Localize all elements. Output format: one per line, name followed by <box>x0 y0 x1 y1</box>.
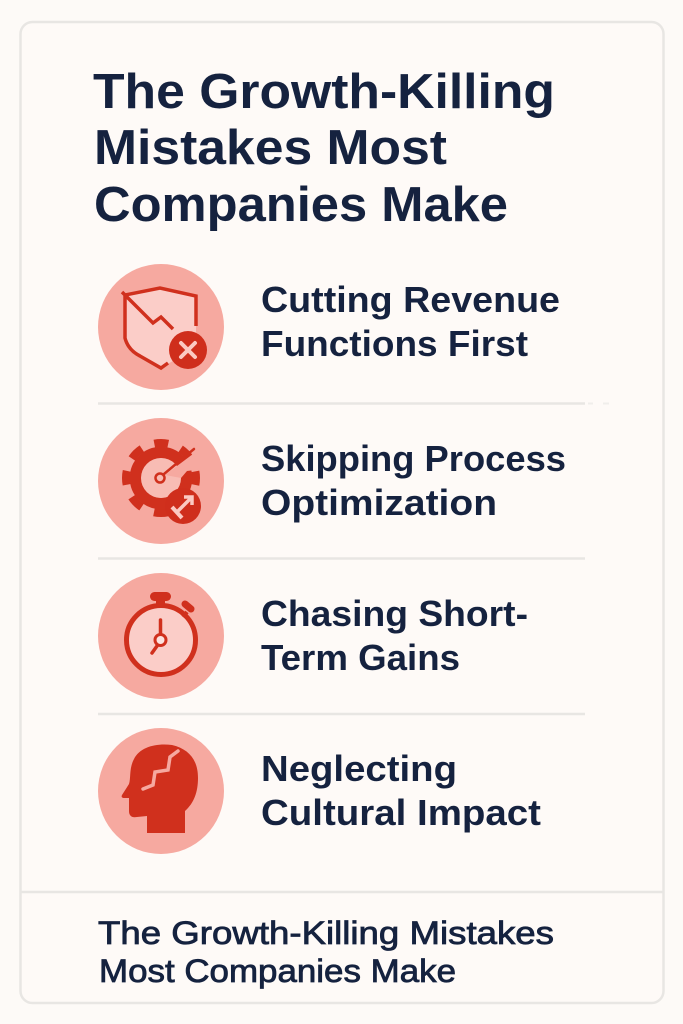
text: item label: Functions First <box>261 323 528 364</box>
icon: cracked head <box>98 728 224 854</box>
footer caption <box>98 915 554 989</box>
text: item label: Cutting Revenue <box>261 279 560 320</box>
item: cutting revenue functions first <box>98 264 560 390</box>
item: neglecting cultural impact <box>98 728 541 854</box>
title: Mistakes Most <box>94 121 447 175</box>
text: item label: Chasing Short- <box>261 593 528 634</box>
footer caption: The Growth-Killing Mistakes <box>98 915 554 951</box>
text: item label <box>261 279 560 364</box>
icon: shield with falling line and x badge <box>98 264 224 390</box>
item: skipping process optimization <box>98 418 566 544</box>
item: chasing short-term gains <box>98 573 528 699</box>
text: item label: Cultural Impact <box>261 792 541 833</box>
text: item label: Neglecting <box>261 748 457 789</box>
footer caption: Most Companies Make <box>99 953 456 989</box>
icon: stopwatch <box>98 573 224 699</box>
text: item label: Term Gains <box>261 637 460 678</box>
text: item label <box>261 593 528 678</box>
icon: gear with gauge and arrow badge <box>98 418 224 544</box>
title: The Growth-Killing <box>93 65 555 119</box>
title <box>93 65 555 232</box>
text: item label <box>261 748 541 833</box>
title: Companies Make <box>94 178 508 232</box>
text: item label <box>261 438 566 523</box>
text: item label: Skipping Process <box>261 438 566 479</box>
text: item label: Optimization <box>261 482 497 523</box>
